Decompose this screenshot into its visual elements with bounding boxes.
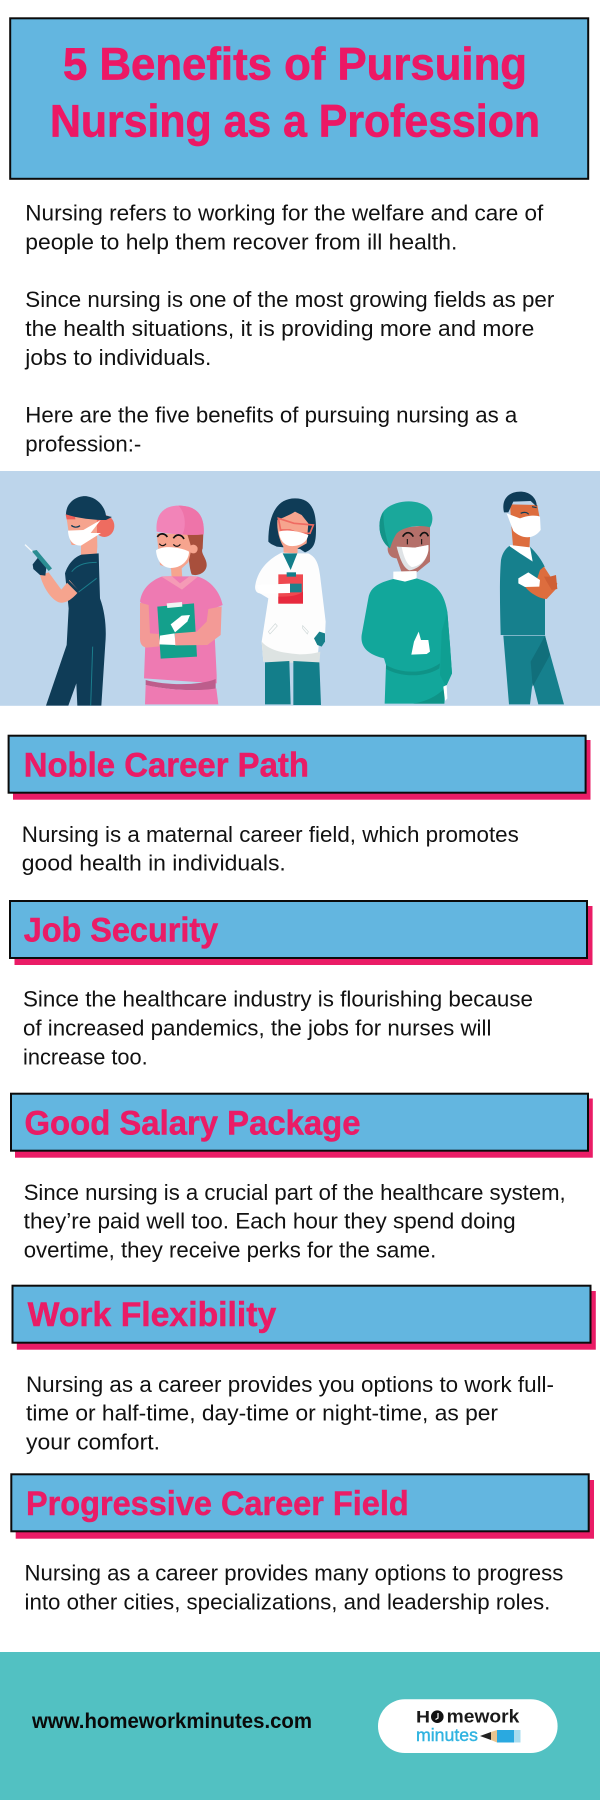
text: noble career path: good health in individuals. <box>22 851 286 876</box>
text: noble career path <box>22 822 519 876</box>
panel: job security <box>10 901 592 965</box>
illustration panel: five nurses <box>0 471 600 706</box>
nurse 5: teal scrubs with crossed arms <box>500 492 564 704</box>
nurse 3: white coat with red clipboard <box>255 498 326 705</box>
panel: noble career path <box>9 736 591 800</box>
text: good salary package: overtime, they receive perks for the same. <box>24 1237 436 1262</box>
text: job security: of increased pandemics, the jobs for nurses will <box>23 1016 491 1041</box>
heading: job security: Job Security <box>24 912 218 950</box>
text: progressive career field: Nursing as a career provides many options to progress <box>24 1561 563 1586</box>
intro text block: people to help them recover from ill health. <box>25 229 457 254</box>
title panel <box>10 18 588 179</box>
text: progressive career field <box>24 1561 563 1615</box>
text: good salary package <box>24 1180 566 1262</box>
intro text block: Since nursing is one of the most growing fields as per <box>25 287 555 312</box>
intro text block: profession:- <box>25 431 141 456</box>
icon: pencil <box>480 1730 520 1742</box>
logo badge <box>378 1699 558 1753</box>
panel: good salary package <box>11 1094 593 1158</box>
text: good salary package: Since nursing is a crucial part of the healthcare system, <box>24 1180 566 1205</box>
footer band <box>0 1652 600 1800</box>
intro text block <box>24 201 555 456</box>
intro text block: Nursing refers to working for the welfare and care of <box>25 201 544 226</box>
heading: good salary package: Good Salary Package <box>24 1104 360 1142</box>
nurse 1: dark scrubs with syringe <box>25 496 114 706</box>
heading: progressive career field: Progressive Career Field <box>26 1485 409 1523</box>
text: good salary package: they’re paid well too. Each hour they spend doing <box>24 1209 516 1234</box>
text: noble career path: Nursing is a maternal career field, which promotes <box>22 822 519 847</box>
text: progressive career field: into other cities, specializations, and leadership roles. <box>24 1590 550 1615</box>
logo badge: mework <box>447 1707 520 1727</box>
logo badge: H <box>416 1708 430 1727</box>
text: job security <box>23 987 533 1069</box>
heading: work flexibility: Work Flexibility <box>28 1296 276 1334</box>
nurse 4: green surgical gown with thumbs up <box>361 501 452 704</box>
logo badge: minutes <box>416 1725 478 1745</box>
nurse 2: pink scrubs with clipboard <box>140 506 223 704</box>
website url: www.homeworkminutes.com <box>31 1710 312 1733</box>
text: job security: Since the healthcare industry is flourishing because <box>23 987 533 1012</box>
title <box>50 38 540 147</box>
intro text block: the health situations, it is providing more and more <box>25 316 534 341</box>
heading: noble career path: Noble Career Path <box>24 747 309 785</box>
text: job security: increase too. <box>23 1044 148 1069</box>
title: Nursing as a Profession <box>50 96 540 147</box>
intro text block: Here are the five benefits of pursuing nursing as a <box>25 402 518 427</box>
panel: progressive career field <box>11 1474 594 1539</box>
text: work flexibility: Nursing as a career provides you options to work full- <box>26 1372 554 1397</box>
text: work flexibility: your comfort. <box>26 1429 160 1454</box>
text: work flexibility: time or half-time, day-time or night-time, as per <box>26 1401 499 1426</box>
text: work flexibility <box>26 1372 554 1454</box>
panel: work flexibility <box>12 1286 596 1350</box>
intro text block: jobs to individuals. <box>24 345 211 370</box>
title: 5 Benefits of Pursuing <box>63 38 527 90</box>
